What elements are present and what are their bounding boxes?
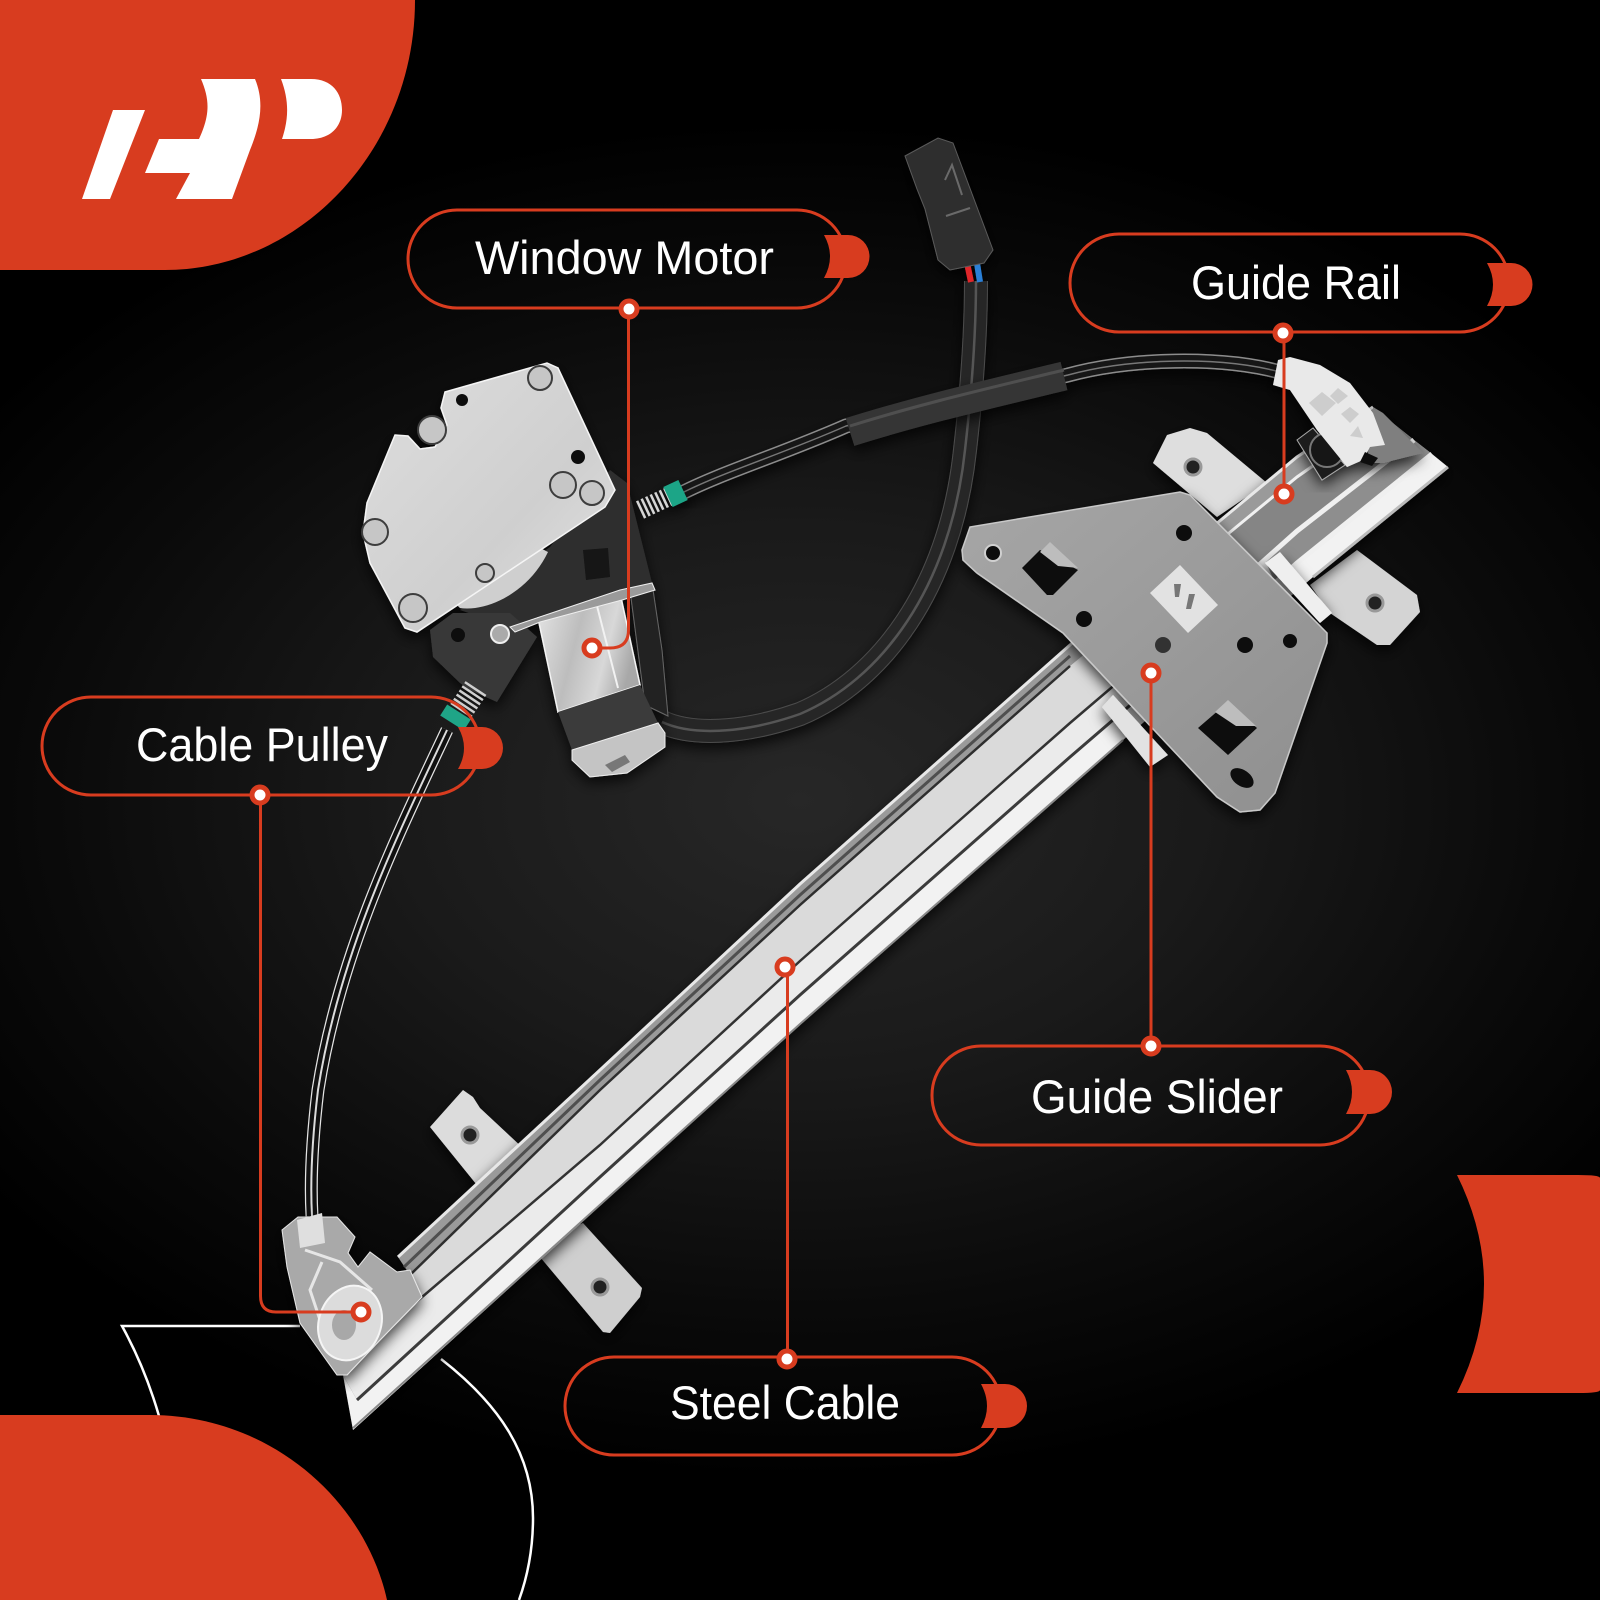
decorative blob: bottom-left bbox=[0, 1415, 387, 1600]
decorative blob: bottom-right bbox=[1457, 1175, 1600, 1393]
guide slider plate bbox=[962, 492, 1332, 812]
callout: Window Motor: Window Motor bbox=[475, 231, 774, 284]
callout: Guide Slider bbox=[932, 665, 1392, 1145]
callout: Guide Slider: Guide Slider bbox=[1031, 1070, 1283, 1123]
logo: APP mark bbox=[82, 79, 342, 199]
motor strap bbox=[630, 583, 668, 716]
callout: Window Motor bbox=[408, 210, 870, 656]
motor can bbox=[538, 593, 640, 712]
callout: Cable Pulley bbox=[42, 697, 503, 1320]
callout: Guide Rail bbox=[1070, 234, 1532, 502]
cover screws bbox=[362, 366, 604, 622]
gear cover plate bbox=[455, 548, 548, 608]
decorative white outline: bottom-left bbox=[122, 1326, 533, 1600]
product: window regulator assembly bbox=[282, 138, 1448, 1430]
motor housing: black bbox=[460, 470, 652, 627]
window motor assembly bbox=[362, 363, 683, 777]
cable spring and green collar: upper bbox=[640, 496, 670, 510]
callout: Steel Cable: Steel Cable bbox=[670, 1376, 900, 1429]
steel cable: lower bbox=[311, 730, 447, 1216]
decorative blob: top-left with logo backdrop bbox=[0, 0, 415, 270]
cable pulley housing: bottom left bbox=[282, 1213, 422, 1375]
mounting tabs behind rail bbox=[430, 428, 1420, 1333]
guide rail body bbox=[343, 407, 1448, 1430]
callout: Cable Pulley: Cable Pulley bbox=[136, 718, 388, 771]
motor wire harness with connector bbox=[662, 138, 993, 731]
drive cable and sleeve: upper bbox=[678, 361, 1280, 495]
callout: Guide Rail: Guide Rail bbox=[1191, 256, 1401, 309]
top-right gray section of the rail bbox=[1223, 416, 1414, 595]
cable pulley housing: top right bbox=[1273, 357, 1423, 480]
callout: Steel Cable bbox=[565, 959, 1027, 1455]
cable spring and green collar: lower bbox=[452, 688, 476, 723]
